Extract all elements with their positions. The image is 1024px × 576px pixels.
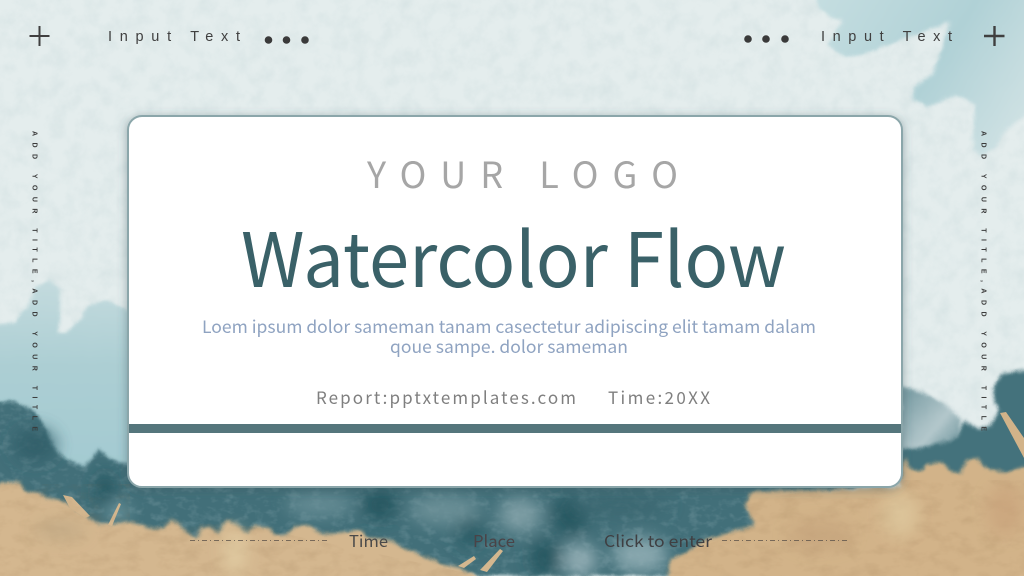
- footer dotted line right: [722, 540, 848, 542]
- wash: sand left: [0, 482, 482, 576]
- vertical text right: ADD YOUR TITLE,ADD YOUR TITLE: [980, 131, 986, 431]
- panel: central card: [128, 116, 902, 487]
- sand spur right: [1000, 412, 1024, 458]
- icon: plus top left: [30, 26, 50, 46]
- footer label: Click to enter: Click to enter: [604, 528, 713, 552]
- footer label: Place: Place: [473, 528, 515, 552]
- wash: dark teal band: [0, 401, 900, 576]
- card divider bar: [129, 424, 901, 433]
- logo text: YOUR LOGO: [366, 147, 678, 199]
- footer dotted line left: [190, 540, 330, 542]
- sand texture: [0, 480, 1024, 576]
- wash: right grey area: [900, 386, 962, 450]
- icon: three dots left: [265, 36, 309, 44]
- title: Watercolor Flow: [241, 200, 786, 309]
- footer label: Time: Time: [349, 528, 388, 552]
- wash: mottled patches: [0, 400, 900, 576]
- sand splashes left: [63, 495, 503, 572]
- vertical text left: ADD YOUR TITLE,ADD YOUR TITLE: [30, 131, 38, 431]
- subtitle: qoue sampe. dolor sameman: [390, 333, 628, 358]
- header text right: Input Text: [821, 29, 952, 45]
- wash: left pale blue area: [0, 280, 135, 500]
- header text left: Input Text: [108, 29, 240, 45]
- wash: right dark teal area: [900, 370, 1024, 480]
- wash: sand right: [668, 458, 1024, 576]
- icon: plus top right: [984, 26, 1004, 46]
- subtitle: [202, 313, 816, 358]
- wash: top right blue blob: [815, 0, 1024, 156]
- time line: Time:20XX: [608, 384, 710, 409]
- icon: three dots right: [744, 35, 789, 43]
- report line: Report:pptxtemplates.com: [316, 384, 576, 409]
- subtitle: Loem ipsum dolor sameman tanam casectetur adipiscing elit tamam dalam: [202, 313, 816, 338]
